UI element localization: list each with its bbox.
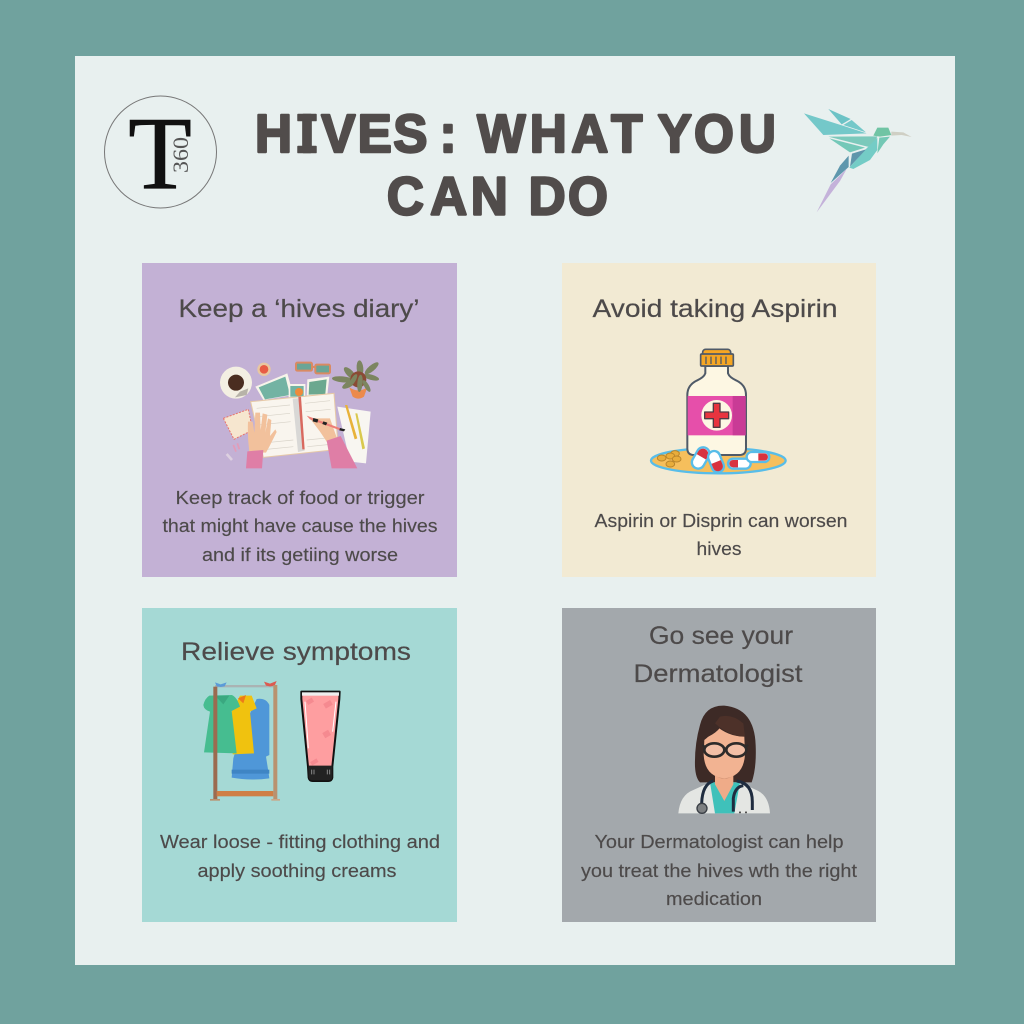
text: aspirin description: hives [696,539,742,559]
text: hives diary description: Keep track of food or trigger [176,488,424,508]
title: CAN DO [387,166,608,227]
text: aspirin description: Aspirin or Disprin can worsen [594,511,848,531]
panel: relieve symptoms [142,608,457,922]
text: hives diary description [162,488,438,565]
heading: hives diary: Keep a ‘hives diary’ [178,295,420,323]
pills [690,445,769,474]
text: hives diary description: and if its getiing worse [202,545,398,565]
heading: see dermatologist: Go see your [649,622,793,650]
text: relieve description: apply soothing creams [198,861,396,881]
icon: T360 logo: 360 [168,137,193,173]
text: aspirin description [594,511,848,559]
icon: diary desk illustration [220,360,380,468]
text: dermatologist description: Your Dermatologist can help [594,832,844,852]
text: hives diary description: that might have cause the hives [162,516,438,536]
heading: see dermatologist [634,622,803,688]
title [255,104,776,227]
text: relieve description [160,832,440,881]
panel: avoid aspirin [562,263,876,577]
icon: clothes rack [203,681,280,801]
text: relieve description: Wear loose - fitting clothing and [160,832,440,852]
heading: avoid aspirin: Avoid taking Aspirin [592,295,838,323]
icon: T360 logo: T [128,96,192,211]
icon: doctor avatar [678,706,770,813]
panel: hives diary [142,263,457,577]
icon: hummingbird [804,109,912,212]
text: dermatologist description [581,832,857,909]
title: HIVES : WHAT YOU [255,104,776,164]
icon: cream tube [301,692,340,781]
panel: see dermatologist [562,608,876,922]
text: dermatologist description: medication [666,889,762,909]
text: dermatologist description: you treat the hives wth the right [581,861,857,881]
icon: medicine bottle and pills [651,349,786,474]
icon: T360 logo [104,96,216,211]
heading: relieve symptoms: Relieve symptoms [181,638,411,666]
heading: see dermatologist: Dermatologist [634,660,803,688]
main light panel [75,56,955,965]
